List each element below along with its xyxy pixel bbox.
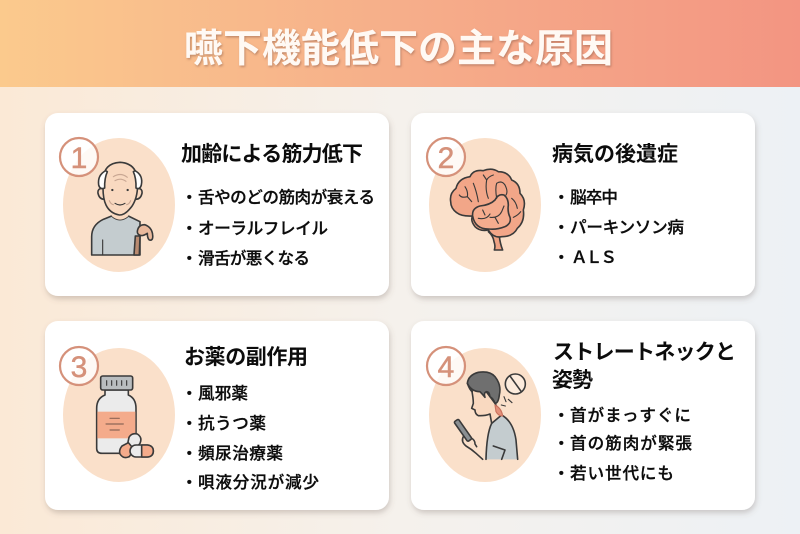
- bullet list: ・: [553, 434, 570, 453]
- panel: straight neck and posture: [411, 321, 755, 510]
- bullet list: ・: [553, 248, 570, 267]
- number badge 1: [60, 138, 98, 176]
- heading: お薬の副作用: [184, 346, 308, 369]
- icon backdrop: [429, 348, 541, 482]
- icon: elderly person with cane: [92, 162, 153, 255]
- bullet list: ・: [181, 249, 198, 268]
- number badge 4: 4: [438, 351, 454, 384]
- bullet list: 若い世代にも: [570, 464, 674, 483]
- number badge 4: [427, 347, 465, 385]
- heading: 加齢による筋力低下: [181, 143, 363, 166]
- bullet list: ・: [553, 464, 570, 483]
- bullet list: 唄液分況が減少: [198, 472, 319, 492]
- heading: 病気の後遺症: [552, 143, 678, 166]
- icon backdrop: [429, 138, 541, 272]
- panel: medication side effects: [45, 321, 389, 510]
- number badge 3: 3: [71, 351, 87, 384]
- bullet list: 頻尿治療薬: [198, 444, 283, 463]
- bullet list: [181, 384, 319, 492]
- panel: disease sequelae: [411, 113, 755, 296]
- bullet list: 滑舌が悪くなる: [198, 248, 310, 268]
- bullet list: パーキンソン病: [570, 218, 684, 237]
- icon backdrop: [63, 348, 175, 482]
- icon backdrop: [63, 138, 175, 272]
- icon: person looking at phone: [454, 372, 525, 459]
- bullet list: 首がまっすぐに: [570, 405, 691, 425]
- heading: [552, 341, 736, 392]
- bullet list: ・: [181, 444, 198, 463]
- bullet list: ・: [553, 218, 570, 237]
- heading: ストレートネックと: [553, 341, 736, 364]
- bullet list: ＡＬＳ: [571, 248, 617, 267]
- number badge 2: [427, 138, 465, 176]
- bullet list: ・: [181, 414, 198, 433]
- number badge 1: 1: [71, 142, 87, 175]
- bullet list: ・: [181, 188, 198, 207]
- bullet list: 首の筋肉が緊張: [570, 433, 692, 453]
- header band: [0, 0, 800, 87]
- bullet list: ・: [553, 188, 570, 207]
- bullet list: [553, 405, 692, 483]
- bullet list: 抗うつ薬: [198, 414, 266, 433]
- bullet list: ・: [553, 406, 570, 425]
- bullet list: ・: [181, 384, 198, 403]
- bullet list: オーラルフレイル: [198, 219, 328, 238]
- icon: medicine bottle and pills: [97, 376, 153, 458]
- icon: brain: [450, 169, 524, 250]
- bullet list: 舌やのどの筋肉が衰える: [198, 187, 375, 207]
- bullet list: [553, 188, 684, 267]
- title: 嚥下機能低下の主な原因: [184, 28, 613, 71]
- number badge 2: 2: [438, 142, 454, 175]
- bullet list: ・: [181, 473, 198, 492]
- number badge 3: [60, 347, 98, 385]
- heading: 姿勢: [552, 369, 593, 392]
- bullet list: 脳卒中: [570, 188, 618, 207]
- panel: aging: [45, 113, 389, 296]
- bullet list: ・: [181, 219, 198, 238]
- bullet list: 風邪薬: [198, 384, 248, 403]
- bullet list: [181, 187, 375, 268]
